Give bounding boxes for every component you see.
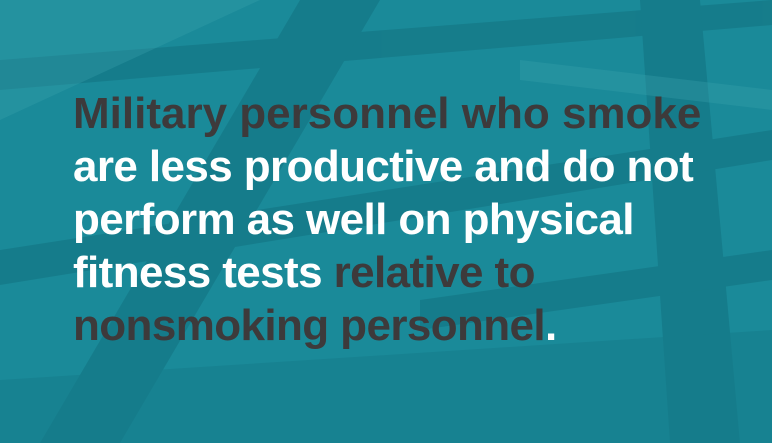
headline text: perform as well on physical	[73, 195, 634, 244]
headline text: nonsmoking personnel.	[73, 301, 557, 350]
headline text: fitness tests relative to	[73, 248, 535, 297]
headline text: are less productive and do not	[73, 142, 693, 191]
headline text: Military personnel who smoke	[73, 89, 701, 138]
headline text	[73, 89, 701, 350]
